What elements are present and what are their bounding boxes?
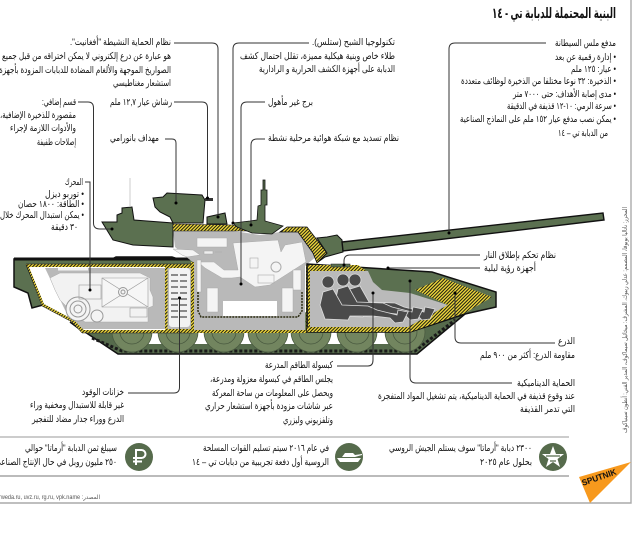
text: delivery 2016: في عام ٢٠١٦ سيتم تسليم القوات المسلحة [203, 443, 329, 454]
text block: extra compartment: إصلاحات طفيفة [37, 137, 76, 148]
fighting compartment [173, 231, 318, 333]
text block: dynamic protection: الحماية الديناميكية [517, 378, 575, 389]
front turret armor [280, 227, 327, 263]
text block: armor [480, 336, 575, 361]
text block: fuel tanks: الدرع ووراء جدار مضاد للتفجير [31, 414, 124, 425]
text block: fuel tanks: خزانات الوقود [82, 387, 124, 398]
callout: dynamic protection [408, 280, 512, 383]
fuel compartment [165, 266, 192, 331]
label: radar guidance: نظام تسديد مع شبكة هوائية مرحلية نشطة [268, 133, 399, 144]
text block: crew capsule: ويحصل على المعلومات من ساحة المعركة [212, 388, 333, 399]
text block: active protection: استشعار مغناطيسي [113, 78, 171, 89]
text block: engine: • يمكن استبدال المحرك خلال [0, 210, 84, 221]
callout: stealth [232, 43, 309, 224]
text block: active protection: نظام الحماية النشيطة "أفغانيت". [70, 35, 171, 48]
text block: fuel tanks [30, 387, 124, 425]
text block: stealth technology: تكنولوجيا الشبح (ستلس). [312, 37, 395, 48]
heavy machine gun [205, 198, 213, 201]
crew silhouettes [320, 274, 435, 323]
engine compartment [26, 264, 194, 333]
callout: engine [85, 182, 92, 292]
armor wedge [307, 278, 492, 332]
text block: engine: • الطاقة: ١٨٠٠ حصان [18, 199, 84, 210]
icon: star [539, 443, 567, 471]
text block: engine: المحرك [65, 177, 83, 188]
text: 2300 tanks [389, 441, 532, 468]
text block: extra compartment: والأدوات اللازمة لإجراء [10, 122, 76, 134]
text block: extra compartment: مقصورة للذخيرة الإضافية، [0, 110, 76, 121]
commander sight housing [153, 193, 205, 223]
label: fire control system: نظام تحكم بإطلاق النار [483, 250, 556, 261]
text: 2300 tanks: ٢٣٠٠ دبابة "أرماتا" سوف يستلم الجيش الروسي [389, 441, 532, 454]
text block: crew capsule: وتلفزيوني وليزري [283, 415, 333, 426]
text block: extra compartment [0, 97, 76, 148]
label: panoramic sight: مهداف بانورامي [110, 133, 159, 144]
callout: fire control [342, 255, 480, 266]
rear turret [102, 207, 173, 247]
turret top armor [173, 224, 247, 231]
engine block [50, 268, 153, 322]
gun mantlet [317, 235, 343, 262]
text block: dynamic protection: التي تدمر القذيفة [520, 404, 575, 415]
logo: sputnik: SPUTNIK [580, 466, 618, 488]
text block: stealth technology: طلاء خاص وبنية هيكلية مميزة، تقلل احتمال كشف [240, 51, 395, 62]
text block: engine [0, 177, 84, 233]
icon: rouble [125, 443, 153, 471]
fire control unit [331, 264, 350, 267]
text block: gun specifications: • سرعة الرمي: ١٠-١٢ قذيفة في الدقيقة [507, 101, 616, 112]
callout: unmanned turret [240, 102, 265, 286]
logo: sputnik [579, 462, 631, 503]
text block: gun specifications [460, 38, 616, 139]
label: night vision: أجهزة رؤية ليلية [484, 261, 536, 274]
source line: المصدر: rweda.ru, uvz.ru, rg.ru, vpk.name [0, 494, 100, 501]
text block: extra compartment: قسم إضافي: [42, 97, 76, 108]
text: price [0, 441, 117, 468]
sensor mast [233, 180, 283, 234]
callout: afghanit [174, 43, 220, 218]
road wheels [112, 312, 425, 352]
text block: dynamic protection [378, 378, 575, 415]
text block: engine: • توربو ديزل [45, 189, 84, 200]
main gun barrel [342, 213, 604, 251]
callout: panoramic sight [165, 139, 178, 204]
callout: crew capsule [337, 292, 374, 366]
text block: active protection: هو عبارة عن درع إلكتروني لا يمكن اختراقه من قبل جميع [2, 51, 171, 62]
text block: stealth technology: الدبابة على أجهزة الكشف الحرارية و الرادارية [259, 62, 395, 75]
rear hull [14, 257, 193, 308]
callout: radar [250, 139, 265, 226]
text block: gun specifications: • الذخيرة: ٣٢ نوعا مختلفا من الذخيرة لوظائف متعددة [461, 76, 616, 87]
callout: gun [448, 43, 546, 234]
text block: dynamic protection: عند وقوع قذيفة في الحماية الديناميكية، يتم تشغيل المواد المتفجرة [378, 391, 575, 402]
faint exhaust line [129, 178, 131, 207]
callout: armor [454, 292, 555, 343]
text block: stealth technology [240, 37, 395, 75]
facts band [0, 437, 569, 476]
text block: armor: مقاومة الدرع: أكثر من ٩٠٠ ملم [480, 348, 575, 361]
text block: active protection: الصواريخ الموجهة والألغام المضادة للدبابات المزودة بأجهزة [0, 63, 171, 76]
text block: armor: الدرع [558, 336, 575, 347]
tank cutaway diagram [14, 180, 604, 354]
turret interior equipment [173, 238, 306, 317]
text block: active protection [0, 35, 171, 89]
text: delivery 2016: الروسية أول دفعة تجريبية من دبابات تي – ١٤ [192, 455, 329, 468]
text block: crew capsule: يجلس الطاقم في كبسولة معزولة ومدرعة، [210, 374, 333, 385]
text block: fuel tanks: غير قابلة للاستبدال ومخفية وراء [30, 400, 124, 411]
text block: engine: ٣٠ دقيقة [51, 222, 78, 233]
text: delivery 2016 [192, 443, 329, 468]
callout: night vision [386, 266, 480, 270]
vertical credits: المحرر: ناتاليا بوبوفا، المصمم: عدلي ريبوك، المشرف: ميخائيل سيماكوف، المدير الفني: أنطون سينياكوف [620, 207, 629, 433]
tracks [70, 314, 465, 354]
active protection block [207, 213, 227, 224]
callout: extra compartment [78, 102, 114, 230]
icon: tank [335, 443, 363, 471]
text block: crew capsule [205, 360, 333, 426]
callout: fuel [128, 296, 181, 393]
crew capsule [307, 264, 496, 332]
label: machine gun: رشاش عيار ١٢,٧ ملم [110, 97, 172, 108]
label: unmanned turret: برج غير مأهول [268, 95, 313, 108]
text block: gun specifications: من الدبابة تي – ١٤ [558, 128, 608, 139]
text block: gun specifications: • عيار: ١٢٥ ملم [571, 64, 616, 75]
text block: crew capsule: كبسولة الطاقم المدرعة [265, 360, 333, 371]
text: price: سيبلغ ثمن الدبابة "أرماتا" حوالي [25, 441, 117, 454]
text: 2300 tanks: بحلول عام ٢٠٢٥ [480, 457, 532, 468]
text block: crew capsule: عبر شاشات مزودة بأجهزة استشعار حراري [205, 399, 333, 412]
callout: machine gun [174, 102, 209, 200]
